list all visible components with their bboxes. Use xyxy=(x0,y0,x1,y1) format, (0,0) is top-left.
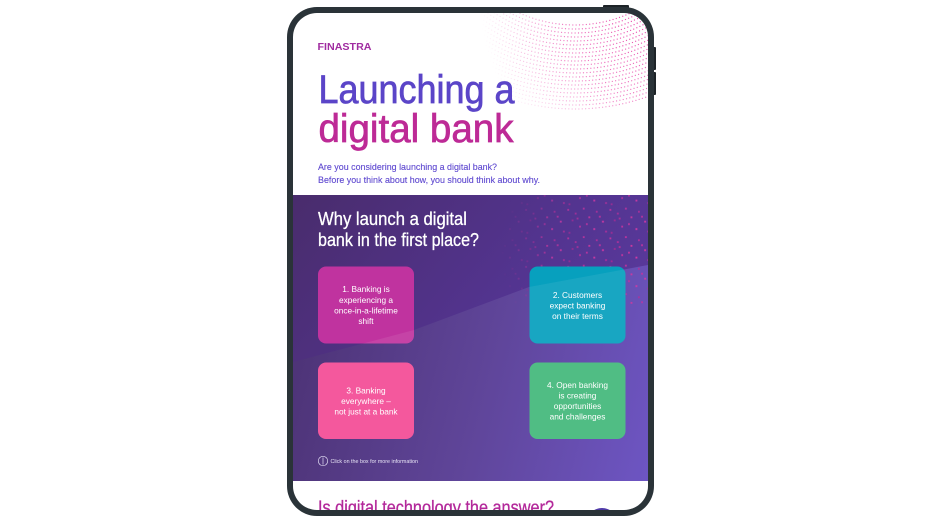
box 4: and challenges xyxy=(550,412,605,422)
panel: why launch xyxy=(293,195,650,481)
box 1: shift xyxy=(358,316,374,326)
heading: why launch: Why launch a digital xyxy=(318,208,467,229)
box 4: opportunities xyxy=(554,401,601,411)
box 1: experiencing a xyxy=(339,295,393,305)
subtitle text xyxy=(318,164,540,185)
box 3: 3. Banking xyxy=(346,386,386,396)
box 3: not just at a bank xyxy=(334,406,398,416)
box 2: 2. Customers xyxy=(553,290,602,300)
box 2: on their terms xyxy=(552,311,603,321)
logo: FINASTRA: FINASTRA xyxy=(318,42,372,53)
box 1 xyxy=(318,266,414,344)
title xyxy=(318,68,515,151)
click hint text: Click on the box for more information xyxy=(330,459,418,465)
heading: why launch: bank in the first place? xyxy=(318,229,479,250)
subtitle text: Before you think about how, you should think about why. xyxy=(318,175,540,186)
tablet device frame xyxy=(287,5,656,516)
icon: info xyxy=(318,456,328,466)
box 1: once-in-a-lifetime xyxy=(334,306,398,316)
box 3: everywhere – xyxy=(341,396,391,406)
box 1: 1. Banking is xyxy=(342,284,390,294)
icon: partial circle xyxy=(594,508,610,510)
box 4: 4. Open banking xyxy=(547,380,608,390)
decorative halftone dots xyxy=(486,13,648,110)
box 2 xyxy=(530,266,626,344)
subtitle text: Are you considering launching a digital bank? xyxy=(318,162,497,173)
heading: why launch xyxy=(318,208,479,250)
box 4: is creating xyxy=(559,390,597,400)
box 4 xyxy=(530,362,626,439)
title: Launching a xyxy=(318,68,515,112)
box 2: expect banking xyxy=(550,300,606,310)
title: digital bank xyxy=(318,107,514,151)
tablet screen xyxy=(293,13,648,510)
heading: is digital technology the answer: Is digital technology the answer? xyxy=(318,498,554,519)
box 3 xyxy=(318,362,414,439)
